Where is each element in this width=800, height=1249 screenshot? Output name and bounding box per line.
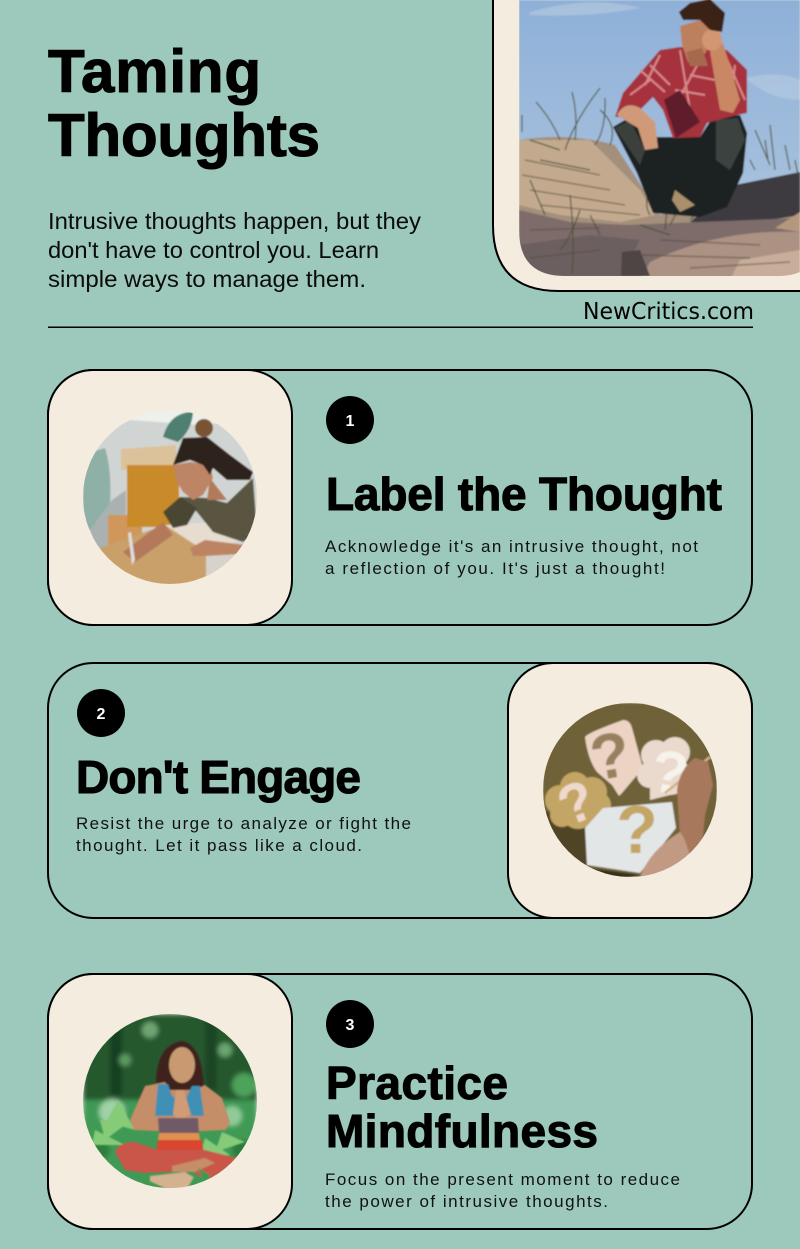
dune mass: [519, 136, 794, 226]
title: Thoughts: [48, 102, 320, 169]
photo: man sitting on dune: [519, 0, 800, 280]
number badge 1: 1: [346, 413, 355, 430]
heading: Practice Mindfulness: Mindfulness: [326, 1105, 598, 1157]
description 1: Acknowledge it's an intrusive thought, not: [325, 537, 698, 556]
panel: step 3: [48, 974, 752, 1229]
number badge 3: 3: [346, 1017, 355, 1034]
photo: woman meditating in garden: [83, 1014, 257, 1190]
intro text: [48, 208, 422, 292]
photo: question mark cut-outs: [543, 703, 717, 885]
description 2: [76, 814, 411, 855]
panel: step 1: [48, 370, 752, 625]
description 3: Focus on the present moment to reduce: [325, 1170, 680, 1189]
description 1: a reflection of you. It's just a thought!: [325, 559, 665, 578]
description 3: [325, 1170, 680, 1211]
header divider: [48, 326, 753, 328]
heading: Practice Mindfulness: Practice: [326, 1057, 508, 1109]
image panel 3: [48, 974, 292, 1229]
description 2: Resist the urge to analyze or fight the: [76, 814, 411, 833]
image panel 1: [48, 370, 292, 625]
title: [48, 38, 320, 169]
number badge 3: [326, 1000, 374, 1048]
heading: Label the Thought: Label the Thought: [326, 468, 722, 520]
image panel 2: [508, 663, 752, 918]
description 1: [325, 537, 698, 578]
title: Taming: [48, 38, 261, 105]
photo: question mark cut-outs: ?: [549, 767, 604, 838]
photo: question mark cut-outs: ?: [646, 736, 693, 809]
panel: step 2: [48, 663, 752, 918]
heading: Don't Engage: Don't Engage: [76, 751, 361, 803]
photo: question mark cut-outs: ?: [616, 792, 658, 868]
photo: woman writing on a box: [83, 410, 257, 590]
description 2: thought. Let it pass like a cloud.: [76, 836, 362, 855]
number badge 2: 2: [97, 706, 106, 723]
photo: question mark cut-outs: ?: [585, 717, 636, 795]
heading: Practice Mindfulness: [326, 1057, 598, 1157]
panel: hero photo frame: [493, 0, 800, 291]
credit: NewCritics.com: NewCritics.com: [583, 297, 754, 325]
number badge 1: [326, 396, 374, 444]
intro text: Intrusive thoughts happen, but they: [48, 208, 422, 234]
number badge 2: [77, 689, 125, 737]
intro text: don't have to control you. Learn: [48, 237, 379, 263]
description 3: the power of intrusive thoughts.: [325, 1192, 608, 1211]
intro text: simple ways to manage them.: [48, 266, 366, 292]
